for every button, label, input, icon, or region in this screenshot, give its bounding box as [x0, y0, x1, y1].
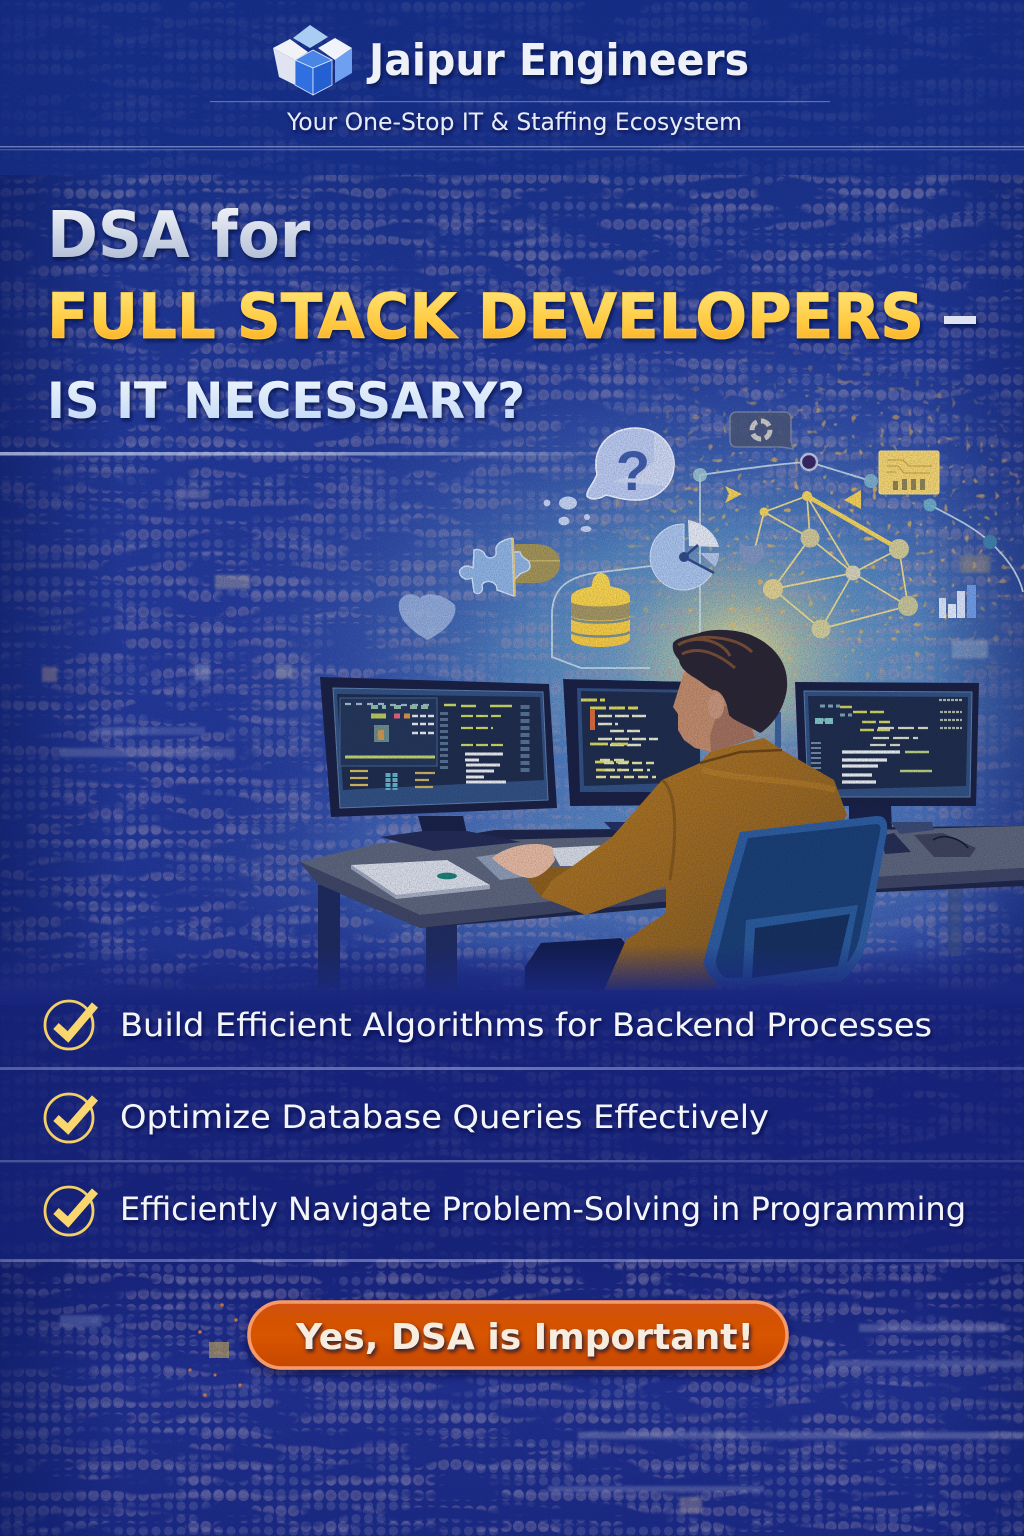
- developer jacket: [528, 738, 847, 990]
- brand name: Jaipur Engineers: [366, 35, 749, 86]
- developer hand: [492, 844, 555, 878]
- title: [47, 199, 976, 430]
- illustration fade: [0, 945, 1024, 1005]
- tagline: Your One-Stop IT & Staffing Ecosystem: [286, 108, 742, 136]
- list divider: [0, 1259, 1024, 1262]
- desk items: [351, 833, 976, 899]
- icon: puzzle pieces: [460, 538, 560, 596]
- item 2: Optimize Database Queries Effectively: [120, 1098, 769, 1136]
- connector nodes: [693, 454, 997, 549]
- title: DSA for: [47, 199, 310, 273]
- developer trousers: [525, 938, 660, 990]
- right monitor: [775, 682, 979, 834]
- office chair: [704, 816, 887, 987]
- developer hair: [673, 630, 787, 733]
- list divider: [0, 1160, 1024, 1162]
- icon: thought dots: [544, 496, 592, 532]
- icon: heart: [399, 594, 455, 640]
- call to action button: Yes, DSA is Important!: [295, 1317, 754, 1358]
- list divider: [0, 1067, 1024, 1070]
- icon: question bubble: [587, 428, 674, 502]
- icon: network graph: [739, 491, 918, 638]
- title: IS IT NECESSARY?: [47, 372, 525, 430]
- icon: bar chart: [939, 585, 976, 618]
- developer face: [673, 665, 755, 752]
- item 1: Build Efficient Algorithms for Backend Processes: [120, 1006, 932, 1044]
- title: FULL STACK DEVELOPERS: [47, 280, 924, 353]
- desk: [300, 826, 1024, 990]
- header logo: [273, 25, 352, 95]
- item 2: [45, 1094, 769, 1142]
- icon: yellow dashboard card: [879, 451, 939, 494]
- centre monitor stub: [604, 822, 630, 832]
- left monitor: [320, 677, 557, 851]
- connector lines: [552, 462, 1023, 680]
- icon: pie chart: [650, 520, 719, 590]
- illustration: developer at desk: [300, 630, 1024, 990]
- icon: speech bubble: [730, 412, 793, 449]
- neck shade: [710, 705, 755, 752]
- item 1: [45, 1001, 932, 1049]
- benefits list: [0, 1001, 1024, 1262]
- icon: question bubble: ?: [616, 439, 650, 502]
- jacket shading: [528, 750, 835, 897]
- developer ear: [708, 693, 724, 719]
- title rule: [0, 452, 640, 456]
- stray pale tiles and streaks: [42, 490, 1024, 1513]
- icon: database: [571, 573, 630, 647]
- header rules: [0, 101, 1024, 150]
- icon: yellow arrows: [725, 486, 861, 509]
- item 3: Efficiently Navigate Problem-Solving in Programming: [120, 1190, 966, 1228]
- gold tile by button: [188, 1303, 242, 1397]
- call to action button: [249, 1302, 787, 1368]
- illustration: floating icons: [399, 412, 1023, 680]
- centre monitor: [563, 679, 700, 806]
